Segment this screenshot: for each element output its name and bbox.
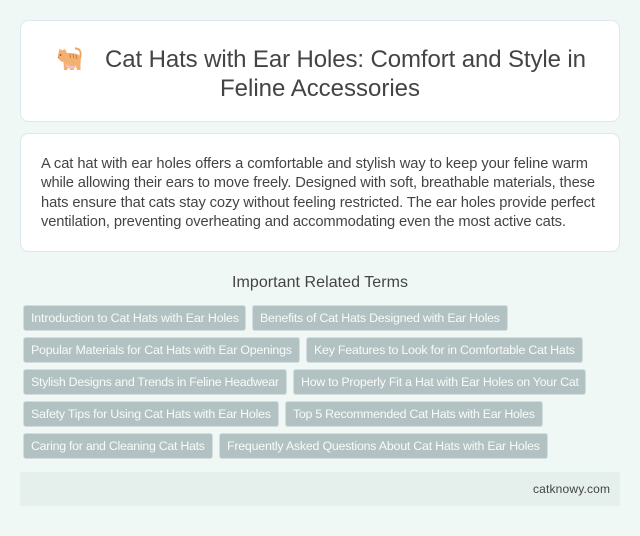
- tag: [252, 306, 508, 330]
- tag: Introduction to Cat Hats with Ear Holes: [31, 311, 239, 325]
- tag: [286, 402, 542, 426]
- title: Cat Hats with Ear Holes: Comfort and Style in: [105, 46, 586, 73]
- tag: Benefits of Cat Hats Designed with Ear Holes: [260, 311, 500, 325]
- description text: A cat hat with ear holes offers a comfortable and stylish way to keep your feline warm: [41, 156, 588, 172]
- icon: cat: [58, 47, 82, 70]
- description text: ventilation, preventing overheating and accommodating even the most active cats.: [41, 214, 566, 230]
- panel: description card: [20, 134, 620, 252]
- tag: Frequently Asked Questions About Cat Hats with Ear Holes: [227, 439, 540, 453]
- tag: Key Features to Look for in Comfortable Cat Hats: [314, 343, 575, 357]
- tag: [24, 402, 278, 426]
- tag: [24, 306, 246, 330]
- heading: important related terms: Important Related Terms: [232, 274, 408, 291]
- tag: Stylish Designs and Trends in Feline Headwear: [31, 375, 279, 389]
- tag: [220, 434, 548, 458]
- tag: [24, 370, 286, 394]
- tag: Top 5 Recommended Cat Hats with Ear Holes: [293, 407, 535, 421]
- tag: [24, 338, 300, 362]
- panel: title card: [20, 20, 620, 122]
- tag: [306, 338, 582, 362]
- tag: [294, 370, 586, 394]
- tag: Safety Tips for Using Cat Hats with Ear Holes: [31, 407, 271, 421]
- tag: Caring for and Cleaning Cat Hats: [31, 439, 205, 453]
- tag: How to Properly Fit a Hat with Ear Holes on Your Cat: [301, 375, 580, 389]
- description text: hats ensure that cats stay cozy without feeling restricted. The ear holes provide perfect: [41, 195, 595, 211]
- tag: [24, 434, 212, 458]
- description text: while allowing their ears to move freely. Designed with soft, breathable materials, these: [40, 175, 595, 191]
- tag list: [24, 306, 586, 458]
- tag: Popular Materials for Cat Hats with Ear Openings: [31, 343, 292, 357]
- description text: [40, 156, 595, 230]
- footer bar: [20, 472, 620, 506]
- title: Feline Accessories: [220, 75, 420, 102]
- title: [105, 46, 586, 102]
- footer source: catknowy.com: [533, 482, 610, 496]
